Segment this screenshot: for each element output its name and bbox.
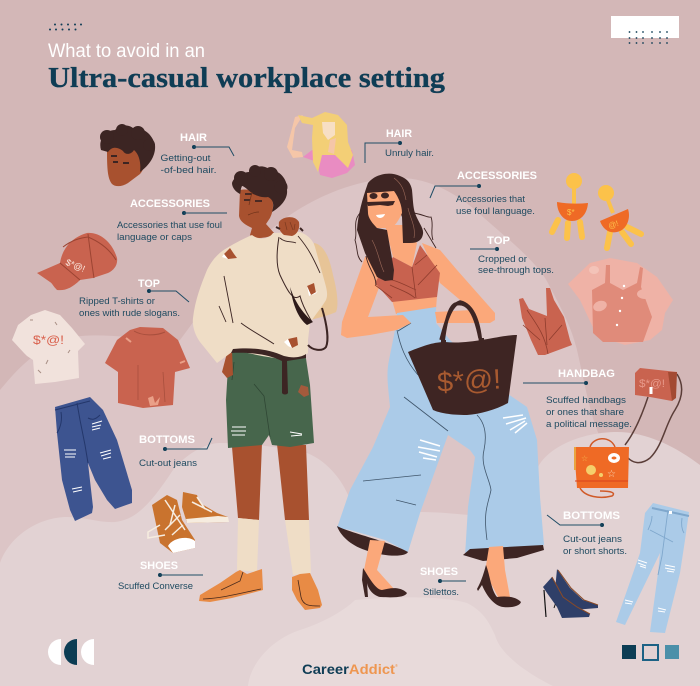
legs: [232, 443, 309, 520]
cropped top: [375, 245, 440, 302]
label: bottoms left: [139, 434, 212, 468]
label: shoes right: [420, 566, 466, 597]
icon: white t-shirt with slogan: $*@!: [33, 333, 64, 347]
label: top left: [79, 278, 189, 318]
title: Ultra-casual workplace setting: [48, 62, 446, 94]
icon: orange sticker bag: ☆: [581, 454, 588, 463]
decorative dots top left: [49, 24, 82, 30]
icon: navy stiletto heels: [543, 569, 598, 618]
icon: orange earrings: [552, 173, 641, 248]
hair: [357, 174, 423, 281]
strap: [277, 237, 312, 322]
wide-leg jeans: [337, 307, 544, 556]
icon: scuffed converse sneakers: [148, 492, 229, 553]
icon: red crossbody bag: $*@!: [639, 378, 665, 390]
icon: orange earrings: @!: [607, 219, 620, 231]
hair: [232, 166, 287, 212]
logo: CareerAddict: CareerAddict: [302, 661, 395, 677]
jeans hems: [337, 526, 544, 561]
label: accessories left: Accessories that use foul: [117, 220, 222, 230]
right arm and hand: [422, 243, 495, 323]
left arm: [341, 255, 411, 338]
icon: salmon ripped t-shirt: [105, 327, 190, 408]
icon: red cap: [37, 233, 117, 290]
smile: [376, 214, 385, 218]
icon: man's head with curly hair: [100, 124, 155, 186]
label: bottoms right: [547, 510, 627, 556]
label: top right: TOP: [487, 235, 510, 247]
icon: light ripped jeans: [616, 503, 689, 633]
backpack: [310, 243, 337, 320]
label: top left: ones with rude slogans.: [79, 308, 180, 318]
icon: orange earrings: $*: [567, 208, 575, 217]
curls: [355, 213, 436, 285]
socks: [237, 518, 311, 575]
figure: man: [193, 165, 337, 610]
decorative white block with dots: [611, 16, 679, 44]
figure: woman: $*@!: [436, 363, 502, 398]
neck and face: [239, 189, 275, 238]
icon: sheer pink shirt over tank: [568, 258, 673, 345]
label: hair right: [365, 128, 434, 163]
label: accessories left: language or caps: [117, 232, 193, 242]
handbag: [408, 335, 517, 415]
sweater: [193, 232, 327, 363]
raised hand: [279, 217, 299, 236]
stiletto shoes: [362, 565, 521, 607]
label: shoes right: SHOES: [420, 566, 458, 578]
label: hair left: [160, 132, 234, 175]
icon: orange sticker bag: ☆: [607, 469, 616, 480]
icon: striped tank top: [519, 288, 572, 355]
handbag handles: [441, 302, 481, 352]
icon: red cap: $*@!: [64, 257, 87, 274]
shoes: [199, 569, 322, 610]
label: handbag: Scuffed handbags: [546, 395, 627, 405]
label: shoes right: Stilettos.: [423, 587, 459, 597]
subtitle: What to avoid in an: [48, 41, 205, 62]
label: bottoms right: Cut-out jeans: [563, 534, 623, 544]
label: top right: Cropped or: [478, 254, 527, 264]
label: handbag: a political message.: [546, 419, 632, 429]
icon: orange sticker bag: [574, 439, 629, 497]
label: top left: TOP: [138, 278, 160, 290]
label: shoes left: Scuffed Converse: [118, 581, 193, 591]
icon: blue ripped jeans: [55, 397, 132, 521]
label: hair left: -of-bed hair.: [160, 165, 216, 175]
label: top right: [470, 235, 554, 275]
icon: white t-shirt with slogan: [12, 310, 85, 384]
rips: [224, 248, 316, 348]
label: handbag: or ones that share: [546, 407, 624, 417]
label: hair right: HAIR: [386, 128, 412, 140]
waist: [392, 296, 437, 314]
belt: [231, 348, 306, 394]
logo: CareerAddict: ®: [395, 663, 398, 668]
label: accessories right: Accessories that: [456, 194, 526, 204]
label: hair left: Getting-out: [160, 153, 211, 163]
label: shoes left: [118, 560, 203, 591]
label: bottoms left: BOTTOMS: [139, 434, 195, 446]
label: top right: see-through tops.: [478, 265, 554, 275]
decorative squares: [622, 645, 679, 660]
label: accessories right: [430, 170, 537, 216]
hand on hip: [222, 350, 233, 378]
decorative half circles: [48, 639, 94, 665]
figure: woman: [337, 174, 544, 607]
label: bottoms right: or short shorts.: [563, 546, 627, 556]
label: hair left: HAIR: [180, 132, 207, 144]
label: top left: Ripped T-shirts or: [79, 296, 155, 306]
label: bottoms right: BOTTOMS: [563, 510, 620, 522]
label: accessories left: [117, 198, 227, 242]
label: accessories right: use foul language.: [456, 206, 535, 216]
label: accessories left: ACCESSORIES: [130, 198, 210, 210]
label: shoes left: SHOES: [140, 560, 178, 572]
neck and chest: [385, 225, 417, 267]
label: hair right: Unruly hair.: [385, 148, 434, 158]
icon: red crossbody bag: [625, 368, 682, 463]
label: handbag: [523, 368, 632, 429]
feet: [364, 540, 510, 597]
label: accessories right: ACCESSORIES: [457, 170, 537, 182]
face: [367, 191, 402, 228]
sunglasses: [367, 201, 395, 206]
label: handbag: HANDBAG: [558, 368, 615, 380]
shorts: [226, 350, 314, 448]
label: bottoms left: Cut-out jeans: [139, 458, 198, 468]
icon: blonde woman with unruly hair: [287, 112, 355, 178]
